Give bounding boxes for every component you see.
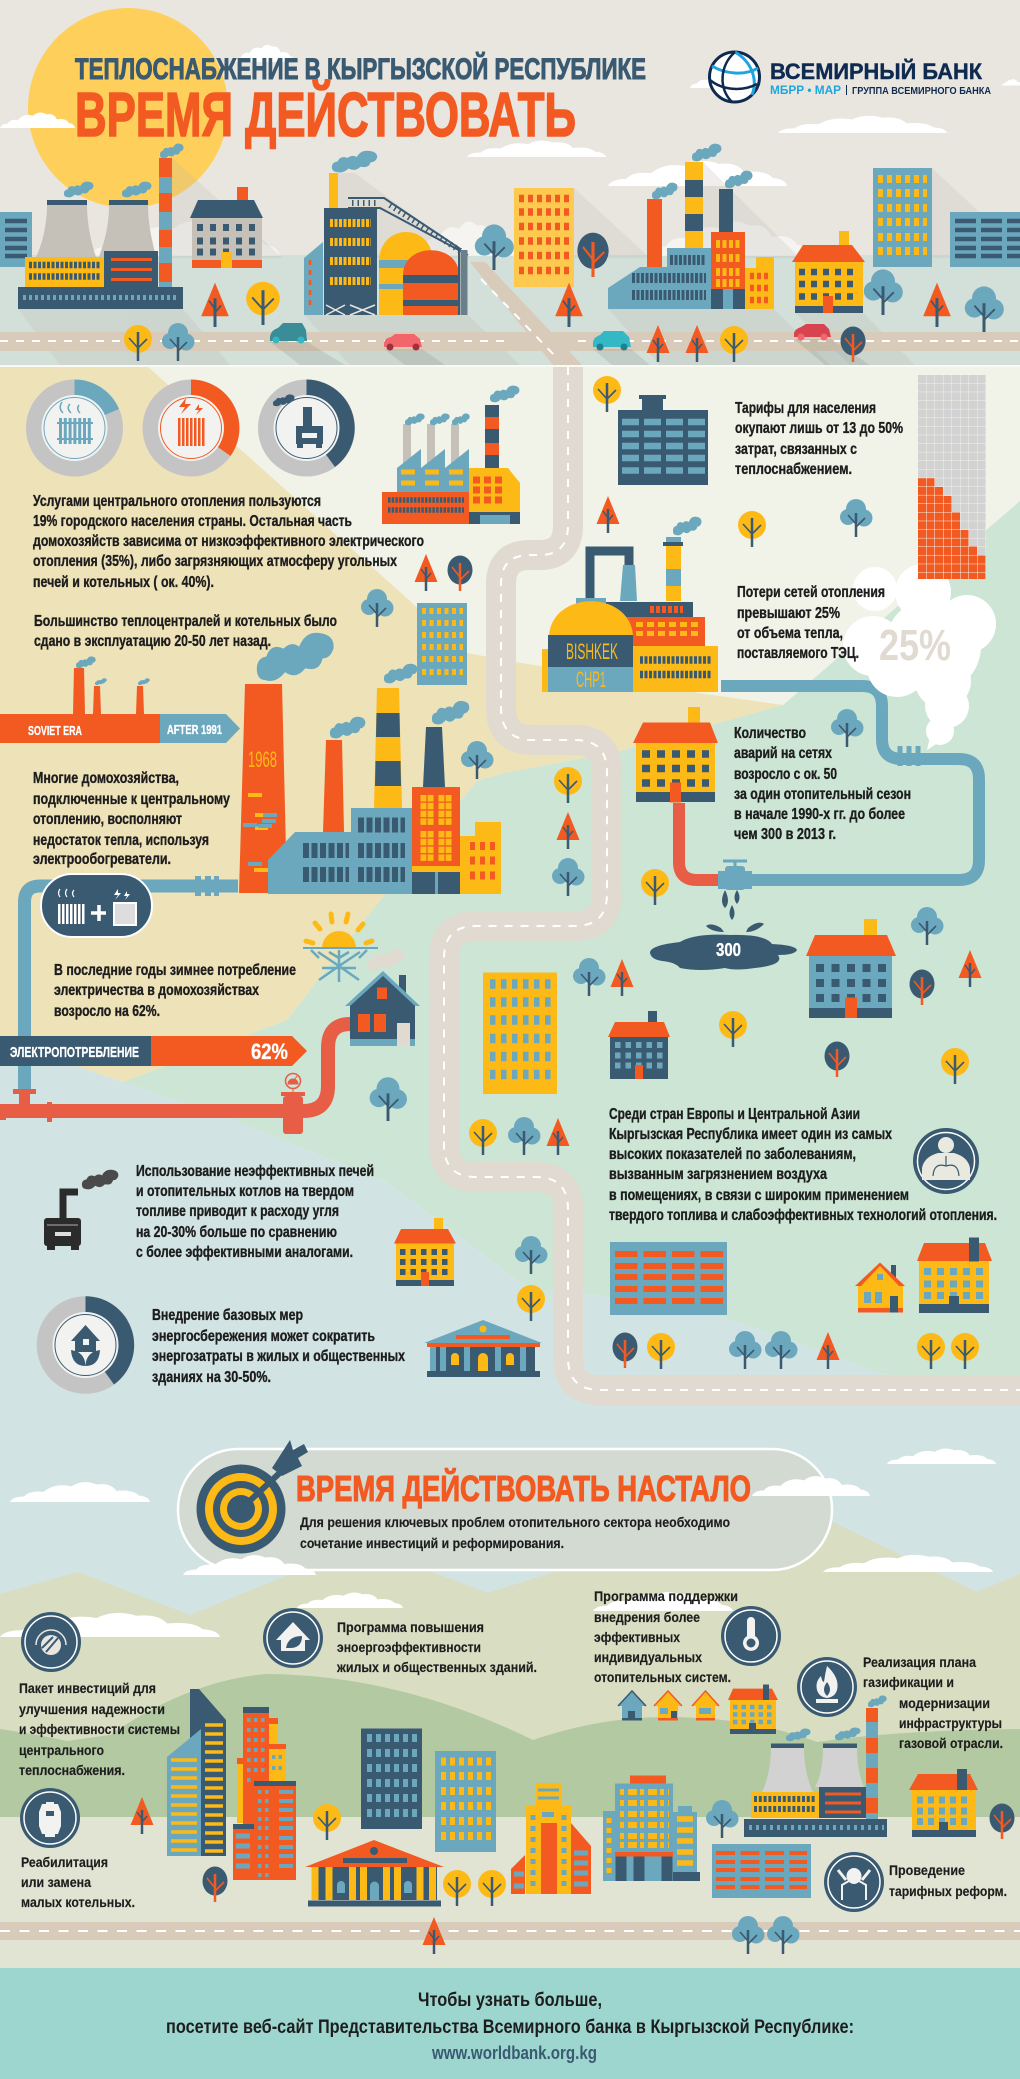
central heating text: печей и котельных ( ок. 40%). [33, 574, 214, 591]
individual systems text: эффективных [594, 1630, 680, 1645]
investment package text: улучшения надежности [19, 1702, 165, 1717]
households text: подключенные к центральному [33, 791, 230, 808]
main area trees [361, 376, 982, 1369]
power plant bottom [744, 1695, 887, 1837]
tall blue building header [873, 168, 932, 267]
investment package text: теплоснабжения. [19, 1763, 125, 1778]
winter consumption text: В последние годы зимнее потребление [54, 962, 296, 979]
blue building with orange windows [610, 1242, 727, 1315]
icon: tariff reform [824, 1852, 884, 1912]
blue and red heating pipes [679, 686, 979, 880]
Bishkek CHP1 plant: CHP1 [576, 667, 606, 692]
individual systems text: внедрения более [594, 1610, 700, 1625]
title: ТЕПЛОСНАБЖЕНИЕ В КЫРГЫЗСКОЙ РЕСПУБЛИКЕ [75, 52, 646, 86]
network accidents text: Количество [734, 725, 806, 742]
individual systems text [594, 1589, 738, 1685]
efficiency program text: жилых и общественных зданий. [336, 1660, 537, 1675]
gasification text [863, 1655, 1003, 1751]
icon: efficient house [263, 1608, 323, 1668]
radiator plus heater pill [41, 874, 152, 937]
gasification text: модернизации [899, 1696, 990, 1711]
bottom landscape [0, 1522, 1020, 1968]
footer: посетите веб-сайт Представительства Всемирного банка в Кыргызской Республике: [166, 2017, 854, 2038]
valve with leak and puddle 300 [650, 860, 797, 970]
winter consumption text: электричества в домохозяйствах [54, 982, 259, 999]
World Bank logo: ВСЕМИРНЫЙ БАНК [770, 59, 983, 84]
tariffs text: теплоснабжением. [735, 461, 852, 478]
electricity consumption arrow [0, 1036, 307, 1066]
navy building bottom [361, 1728, 422, 1829]
right blue building header [950, 212, 1020, 267]
tariffs text: Тарифы для населения [735, 400, 876, 417]
government building middle [424, 1320, 542, 1377]
yellow apartment right [917, 1238, 992, 1313]
tariffs text: окупают лишь от 13 до 50% [735, 420, 903, 437]
energy saving text [152, 1307, 405, 1386]
footer: www.worldbank.org.kg [431, 2043, 597, 2063]
central heating text [33, 493, 424, 591]
steam cloud with 25% [843, 564, 996, 750]
tall yellow building middle [483, 972, 557, 1094]
heat losses text [737, 584, 885, 662]
investment package text: и эффективности системы [19, 1722, 180, 1737]
blue building bottom [435, 1751, 496, 1852]
call to action banner: Для решения ключевых проблем отопительного сектора необходимо [300, 1515, 730, 1530]
header scene background [0, 0, 1020, 367]
donut: central heating 19% [26, 380, 123, 476]
coverage donut charts [26, 380, 355, 476]
boiler text: малых котельных. [21, 1895, 135, 1910]
house with red pipe [345, 949, 420, 1046]
timeline arrow: Soviet era to after 1991 [0, 656, 240, 743]
orange building group [233, 1707, 296, 1880]
call to action banner: сочетание инвестиций и реформирования. [300, 1536, 564, 1551]
investment package text: Пакет инвестиций для [19, 1681, 156, 1696]
investment package text [19, 1681, 180, 1778]
blue office complex [603, 1776, 700, 1881]
gasification text: инфраструктуры [899, 1716, 1002, 1731]
icon: gas flame [797, 1657, 857, 1717]
small yellow cottage [855, 1262, 905, 1312]
households text: отоплению, восполняют [33, 811, 182, 828]
title: ВРЕМЯ ДЕЙСТВОВАТЬ [75, 80, 576, 150]
households text: недостаток тепла, используя [33, 832, 209, 849]
World Bank logo: МБРР • МАР [770, 83, 841, 97]
icon: boiler [20, 1788, 80, 1848]
gasification text: Реализация плана [863, 1655, 976, 1670]
central industrial complex [304, 151, 468, 315]
air pollution text: Кыргызская Республика имеет один из самых [609, 1126, 892, 1143]
Bishkek CHP1 plant: BISHKEK [566, 639, 618, 664]
electricity consumption arrow: 62% [251, 1039, 288, 1064]
bottom clouds [0, 1448, 996, 1637]
power plant with cooling towers [18, 144, 184, 309]
blue tower building [417, 603, 467, 685]
yellow house with orange roof [633, 707, 718, 802]
boiler text: Реабилитация [21, 1855, 108, 1870]
investment package text: центрального [19, 1743, 104, 1758]
tariff reform text: Проведение [889, 1863, 965, 1878]
steam cloud with 25%: 25% [879, 621, 951, 670]
inefficient stoves text: топливе приводит к расходу угля [136, 1203, 339, 1220]
heat losses text: превышают 25% [737, 605, 840, 622]
background zones [0, 365, 1020, 1620]
air pollution text: Среди стран Европы и Центральной Азии [609, 1106, 860, 1123]
inefficient stoves text: с более эффективными аналогами. [136, 1244, 353, 1261]
factory top left [382, 386, 520, 524]
tariffs text: затрат, связанных с [735, 441, 857, 458]
air pollution text: вызванным загрязнением воздуха [609, 1166, 827, 1183]
heat losses text: Потери сетей отопления [737, 584, 885, 601]
sun [28, 8, 228, 208]
tariffs text [735, 400, 903, 478]
heat losses text: поставляемого ТЭЦ. [737, 645, 859, 662]
red pipe [0, 1024, 350, 1134]
cars [270, 323, 870, 365]
donut: energy saving 40% [37, 1296, 134, 1394]
grey house [190, 187, 263, 268]
blue house [806, 919, 896, 1018]
efficiency program text: эноергоэффективности [337, 1640, 481, 1655]
footer: Чтобы узнать больше, [418, 1990, 602, 2011]
network accidents text [734, 725, 911, 843]
Bishkek CHP1 plant [542, 517, 718, 692]
yellow building right bottom [909, 1769, 978, 1837]
yellow apartment in row [728, 1684, 778, 1734]
footer [0, 1968, 1020, 2079]
right factory [608, 144, 774, 309]
header road [0, 262, 1020, 365]
valve with leak and puddle 300: 300 [716, 940, 741, 960]
heat losses text: от объема тепла, [737, 625, 843, 642]
energy saving text: зданиях на 30-50%. [152, 1369, 271, 1386]
age of plants text: Большинство теплоцентралей и котельных было [34, 613, 337, 630]
donut: coal stoves 40% [258, 380, 355, 476]
call to action banner: ВРЕМЯ ДЕЙСТВОВАТЬ НАСТАЛО [296, 1467, 751, 1509]
age of plants text [34, 613, 337, 650]
stove icon [44, 1170, 118, 1250]
households text [33, 770, 230, 868]
air pollution text [609, 1106, 997, 1224]
sun and snowflake icon [303, 914, 378, 982]
World Bank logo [710, 52, 991, 102]
yellow house header [792, 231, 865, 313]
left edge blue building [0, 212, 32, 267]
inefficient stoves text: Использование неэффективных печей [136, 1163, 374, 1180]
individual systems text: отопительных систем. [594, 1670, 731, 1685]
navy office building [618, 395, 708, 485]
tariff reform text [889, 1863, 1007, 1899]
efficiency program text [336, 1620, 537, 1675]
waffle chart: tariff cost recovery [918, 375, 986, 579]
boiler text: или замена [21, 1875, 91, 1890]
households text: электрообогреватели. [33, 851, 171, 868]
central heating text: Услугами центрального отопления пользуются [33, 493, 321, 510]
icon: thermometer [721, 1606, 781, 1666]
network accidents text: чем 300 в 2013 г. [734, 826, 836, 843]
central heating text: 19% городского населения страны. Остальная часть [33, 513, 352, 530]
energy saving text: энергозатраты в жилых и общественных [152, 1348, 405, 1365]
electricity consumption arrow: ЭЛЕКТРОПОТРЕБЛЕНИЕ [10, 1044, 139, 1061]
government building bottom [305, 1840, 444, 1906]
blue low building bottom [712, 1844, 811, 1898]
gasification text: газовой отрасли. [899, 1736, 1003, 1751]
1968 chimney [239, 684, 287, 893]
central heating text: отопления (35%), либо загрязняющих атмосферу угольных [33, 553, 397, 570]
tariff reform text: тарифных реформ. [889, 1884, 1007, 1899]
efficiency program text: Программа повышения [337, 1620, 484, 1635]
inefficient stoves text: на 20-30% больше по сравнению [136, 1224, 337, 1241]
yellow and orange tower [511, 1783, 591, 1894]
network accidents text: аварий на сетях [734, 745, 832, 762]
network accidents text: возросло с ок. 50 [734, 766, 837, 783]
households text: Многие домохозяйства, [33, 770, 179, 787]
tall yellow building [514, 188, 574, 287]
header trees [124, 224, 1004, 362]
skyscraper [167, 1689, 226, 1856]
navy house [608, 1011, 670, 1079]
air pollution text: в помещениях, в связи с широким применением [609, 1187, 909, 1204]
icon: lungs [913, 1128, 979, 1194]
World Bank logo: ГРУППА ВСЕМИРНОГО БАНКА [852, 85, 991, 97]
long building shadows [18, 158, 1020, 365]
timeline arrow: Soviet era to after 1991: SOVIET ERA [28, 723, 82, 738]
icon: target with arrow [196, 1440, 308, 1554]
individual systems text: индивидуальных [594, 1650, 702, 1665]
row of small houses [618, 1684, 778, 1734]
inefficient stoves text [136, 1163, 374, 1261]
network accidents text: в начале 1990-х гг. до более [734, 806, 905, 823]
bottom trees [130, 1797, 1014, 1954]
age of plants text: сдано в эксплуатацию 20-50 лет назад. [34, 633, 271, 650]
energy saving text: Внедрение базовых мер [152, 1307, 303, 1324]
call to action banner [178, 1440, 870, 1575]
small yellow house left [394, 1218, 456, 1286]
gasification text: газификации и [863, 1675, 954, 1690]
header clouds [0, 45, 1020, 256]
1968 chimney: 1968 [248, 747, 277, 772]
central heating text: домохозяйств зависима от низкоэффективного электрического [33, 533, 424, 550]
blue pipe to radiators [24, 876, 238, 1089]
inefficient stoves text: и отопительных котлов на твердом [136, 1183, 354, 1200]
air pollution text: высоких показателей по заболеваниям, [609, 1146, 856, 1163]
winding road [444, 367, 1020, 1390]
individual systems text: Программа поддержки [594, 1589, 738, 1604]
title [75, 52, 646, 150]
winter consumption text [54, 962, 296, 1020]
energy saving text: энергосбережения может сократить [152, 1328, 375, 1345]
1968 chimney and complex [239, 633, 501, 894]
winter consumption text: возросло на 62%. [54, 1003, 160, 1020]
donut: electric heating 35% [142, 380, 240, 476]
network accidents text: за один отопительный сезон [734, 786, 911, 803]
timeline arrow: Soviet era to after 1991: AFTER 1991 [167, 722, 222, 737]
icon: dial investment package [21, 1612, 81, 1672]
boiler text [21, 1855, 135, 1910]
